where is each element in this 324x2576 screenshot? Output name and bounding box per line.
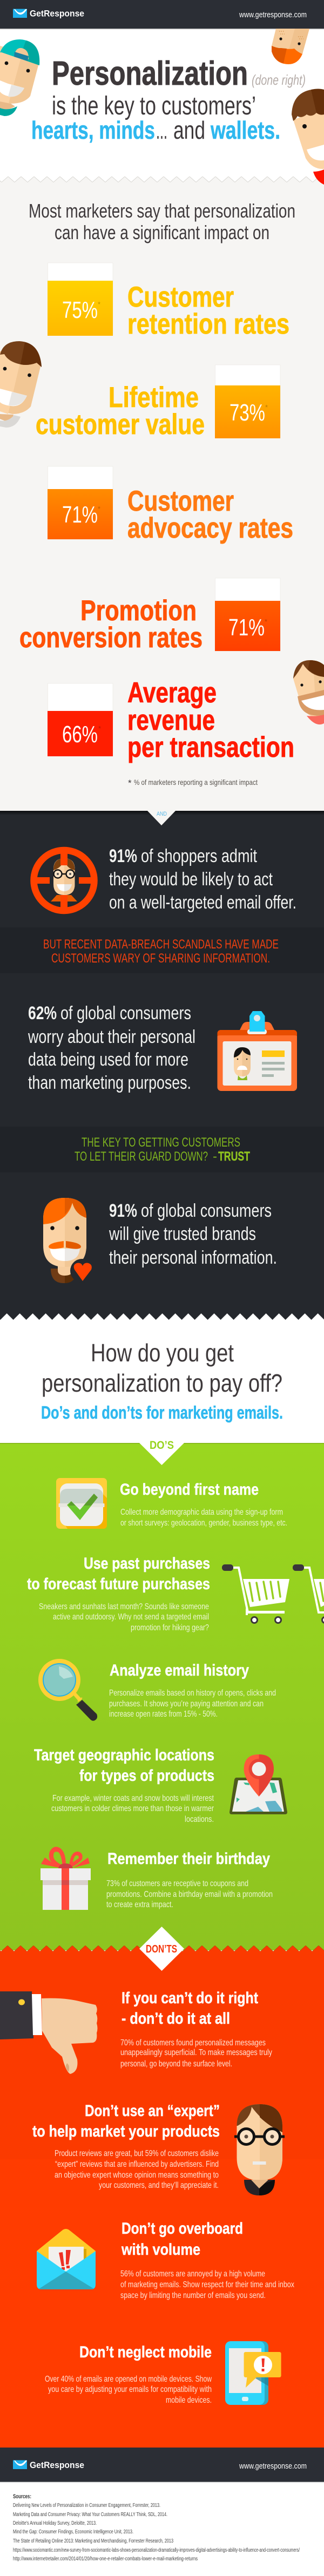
don't: overboard volume: [120, 2220, 294, 2300]
do: use past purchases: Sneakers and sunhats last month? Sounds like someone: [39, 1602, 209, 1611]
icon: map pin: [230, 1754, 287, 1814]
DO'S marker: [139, 1439, 184, 1465]
icon: phone alert: [225, 2341, 281, 2405]
character: brown hair with smile: [292, 89, 324, 185]
stat: customer advocacy 71%: Customer: [127, 485, 234, 517]
text: 91% of shoppers: of shoppers admit: [141, 846, 257, 866]
don't: do it right: - don’t do it at all: [122, 2010, 230, 2028]
don't: do it right: personal, go beyond the surface level.: [120, 2059, 232, 2069]
stat: lifetime value 73%: 73%: [230, 399, 265, 426]
icon: shopping carts: [222, 1564, 324, 1623]
heading: how to get pay off: How do you get: [91, 1339, 234, 1367]
don't: do it right: [120, 1989, 272, 2069]
text: 62% of global consumers: worry about their personal: [28, 1027, 195, 1047]
do: remember birthday: promotions. Combine a birthday email with a promotion: [106, 1890, 273, 1899]
do: go beyond first name: Collect more demographic data using the sign-up form: [120, 1508, 283, 1517]
do: use past purchases: active and outdoorsy. Why not send a targeted email: [53, 1612, 209, 1622]
text: 62% of global consumers: than marketing purposes.: [28, 1073, 191, 1093]
don't: neglect mobile: Over 40% of emails are opened on mobile devices. Show: [45, 2375, 212, 2384]
icon: GetResponse logo: [13, 2460, 27, 2469]
note: done right: (done right): [252, 72, 306, 88]
don't: do it right: If you can’t do it right: [122, 1989, 258, 2007]
sources list: [13, 2493, 300, 2562]
stat: customer advocacy 71%: [48, 466, 293, 544]
don't: do it right: unappealingly superficial. To make messages truly: [120, 2048, 272, 2057]
footer bar: [0, 2448, 324, 2482]
do: remember birthday: 73% of customers are receptive to coupons and: [106, 1879, 248, 1888]
do: analyze email history: increase open rates from 15% - 50%.: [109, 1710, 218, 1719]
icon: magnifier: [38, 1659, 97, 1721]
stat: average revenue 66%: [48, 677, 294, 763]
band text: trust: TO LET THEIR GUARD DOWN?: [75, 1149, 208, 1164]
icon: overflowing envelope: [37, 2229, 96, 2289]
icon: target on shopper: [33, 848, 94, 913]
band text: trust: [75, 1135, 250, 1164]
do: remember birthday: to create extra impact.: [106, 1900, 173, 1909]
text: 91% of global consumers: [109, 1201, 277, 1268]
stat: customer retention 75%: Customer: [127, 281, 234, 313]
title line: Personalization: Personalization: [52, 55, 248, 92]
green section: do's: [0, 1439, 324, 1950]
icon: gift: [40, 1847, 91, 1910]
website url: www.getresponse.com: [239, 2462, 307, 2471]
icon: ID badge: [217, 1011, 297, 1091]
sources list: Marketing Data and Consumer Privacy: What Your Customers REALLY Think, SDL, 2014.: [13, 2512, 167, 2518]
don't: neglect mobile: mobile devices.: [166, 2396, 212, 2405]
footnote: % of marketers reporting a significant impact: [134, 778, 258, 787]
text: 62% of global consumers: 62%: [28, 1003, 57, 1023]
do: target geographic locations: customers in colder climes more than those in warmer: [51, 1804, 214, 1813]
text: 62% of global consumers: [28, 1003, 195, 1093]
sources list: The State of Retailing Online 2013: Marketing and Merchandising, Forrester Research, 2013: [13, 2538, 173, 2544]
do: remember birthday: [106, 1850, 273, 1909]
don't: neglect mobile: [45, 2343, 212, 2405]
don't: use an expert: “expert” reviews that are influenced by advertisers. Find: [55, 2160, 219, 2169]
stat: customer advocacy 71%: *: [98, 505, 100, 513]
brand name: GetResponse: [30, 2460, 84, 2470]
top header bar: [0, 0, 324, 29]
do: analyze email history: purchases. It shows you’re paying attention and can: [109, 1699, 264, 1709]
do: target geographic locations: locations.: [185, 1815, 214, 1824]
stat: customer retention 75%: *: [98, 300, 100, 308]
do: go beyond first name: [120, 1481, 287, 1528]
title line: key to customers: is the key to customers’: [52, 92, 256, 120]
footnote: *: [128, 778, 132, 788]
don't: use an expert: Product reviews are great, but 59% of customers dislike: [55, 2149, 219, 2158]
do: use past purchases: Use past purchases: [84, 1555, 210, 1572]
do: target geographic locations: for types of products: [79, 1767, 214, 1785]
stat: average revenue 66%: Average: [127, 677, 217, 709]
band text: data breach: [43, 937, 279, 966]
AND marker arrow: AND: [157, 811, 167, 817]
character: moustache with heart: [43, 1198, 94, 1283]
don't: use an expert: to help market your products: [32, 2123, 220, 2140]
character: orange beard: [272, 29, 309, 64]
icon: GetResponse logo: [13, 9, 27, 18]
dark section: [0, 811, 324, 1320]
text: 62% of global consumers: of global consumers: [60, 1003, 191, 1023]
character: teal cap: [0, 39, 39, 116]
do: target geographic locations: Target geographic locations: [34, 1746, 214, 1764]
stat: lifetime value 73%: customer value: [36, 409, 205, 440]
paper section background: [0, 182, 324, 811]
character: expert with glasses: [234, 2104, 285, 2195]
stat: lifetime value 73%: *: [265, 403, 268, 411]
stat: promotion conversion 71%: 71%: [228, 614, 265, 641]
DO'S marker: DO’S: [150, 1439, 174, 1452]
stat: promotion conversion 71%: *: [265, 618, 267, 626]
title line: hearts, minds and wallets: hearts, minds: [31, 116, 155, 144]
do: analyze email history: Analyze email history: [110, 1662, 249, 1679]
title line: hearts, minds and wallets: wallets.: [210, 116, 280, 144]
AND marker arrow: [147, 811, 176, 825]
do: target geographic locations: [34, 1746, 214, 1824]
stat: customer retention 75%: 75%: [62, 297, 98, 323]
character: brown hair left: [0, 341, 42, 428]
heading: significant impact: [29, 200, 295, 243]
text: 91% of shoppers: they would be likely to act: [109, 869, 273, 890]
stat: lifetime value 73%: Lifetime: [109, 382, 199, 413]
don't: overboard volume: Don’t go overboard: [122, 2220, 243, 2238]
icon: check mark card: [56, 1478, 107, 1529]
do: use past purchases: to forecast future purchases: [27, 1575, 210, 1593]
band text: trust: THE KEY TO GETTING CUSTOMERS: [82, 1135, 240, 1150]
icon: thumbs down: [0, 1991, 97, 2074]
don't: overboard volume: 56% of customers are annoyed by a high volume: [120, 2269, 265, 2279]
heading: significant impact: can have a significant impact on: [55, 221, 269, 243]
text: 91% of global consumers: will give trusted brands: [109, 1224, 256, 1244]
footnote: [128, 778, 258, 788]
character: brown hair with beard: [293, 660, 324, 724]
text: 91% of global consumers: 91%: [109, 1201, 137, 1221]
text: 62% of global consumers: data being used for more: [28, 1049, 188, 1070]
sources list: Deloitte's Annual Holiday Survey, Deloitte, 2013.: [13, 2520, 97, 2526]
don't: overboard volume: space by limiting the number of emails you send.: [120, 2291, 266, 2300]
stat: average revenue 66%: revenue: [127, 704, 215, 736]
stat: promotion conversion 71%: Promotion: [80, 595, 197, 627]
don't: neglect mobile: you care by adjusting your emails for compatibility with: [48, 2385, 212, 2394]
DON'TS marker: DON’TS: [146, 1943, 177, 1955]
band text: trust: -: [213, 1149, 217, 1164]
stat: average revenue 66%: *: [98, 724, 101, 733]
don't: overboard volume: with volume: [121, 2241, 200, 2259]
stat: customer advocacy 71%: 71%: [62, 501, 98, 528]
do: use past purchases: promotion for hiking gear?: [131, 1623, 209, 1632]
brand name: GetResponse: [30, 9, 84, 18]
website url: www.getresponse.com: [239, 10, 307, 19]
band text: trust: TRUST: [218, 1149, 250, 1164]
stat: lifetime value 73%: [36, 365, 280, 440]
sources list: Delivering New Levels of Personalization in Consumer Engagement, Forrester, 2013.: [13, 2503, 160, 2509]
sources list: Mind the Gap: Consumer Findings, Economic Intelligence Unit, 2013.: [13, 2529, 133, 2535]
stat: customer retention 75%: [48, 263, 289, 340]
text: 91% of shoppers: [109, 846, 296, 913]
stat: average revenue 66%: 66%: [62, 721, 98, 748]
don't: neglect mobile: Don’t neglect mobile: [79, 2343, 212, 2361]
don't: use an expert: [32, 2102, 220, 2190]
don't: use an expert: Don’t use an “expert”: [85, 2102, 220, 2120]
do: remember birthday: Remember their birthday: [107, 1850, 270, 1868]
heading: how to get pay off: personalization to pay off?: [42, 1369, 282, 1397]
don't: use an expert: your customers, and they’ll appreciate it.: [99, 2181, 219, 2190]
title line: hearts, minds and wallets: and: [173, 116, 205, 144]
text: 91% of global consumers: their personal information.: [109, 1248, 277, 1268]
do: target geographic locations: For example, winter coats and snow boots will interest: [52, 1794, 214, 1803]
do: go beyond first name: Go beyond first name: [120, 1481, 259, 1499]
title line: hearts, minds and wallets: ...: [156, 116, 167, 144]
text: 91% of shoppers: 91%: [109, 846, 137, 866]
stat: promotion conversion 71%: [19, 578, 280, 654]
do: analyze email history: [109, 1662, 276, 1719]
DON'TS marker: [139, 1927, 184, 1971]
title line: hearts, minds and wallets: [31, 116, 280, 144]
heading: how to get pay off: [41, 1339, 283, 1422]
do: use past purchases: [27, 1555, 210, 1632]
sources list: http://www.internetretailer.com/2014/01/20/how-one-e-retailer-combats-lower-e-mail-marketing-returns: [13, 2556, 198, 2562]
white zigzag edge: [0, 1313, 324, 1320]
main title: [31, 55, 306, 144]
red section: don'ts: [0, 1927, 324, 2448]
text: 91% of global consumers: of global consumers: [141, 1201, 272, 1221]
paper zigzag edge: [0, 177, 324, 183]
sources list: Sources:: [13, 2493, 31, 2500]
do: analyze email history: Personalize emails based on history of opens, clicks and: [109, 1689, 276, 1698]
don't: do it right: 70% of customers found personalized messages: [120, 2038, 266, 2048]
stat: customer retention 75%: retention rates: [127, 308, 289, 340]
stat: promotion conversion 71%: conversion rates: [19, 622, 202, 654]
don't: use an expert: an objective expert whose opinion means something to: [55, 2171, 219, 2180]
